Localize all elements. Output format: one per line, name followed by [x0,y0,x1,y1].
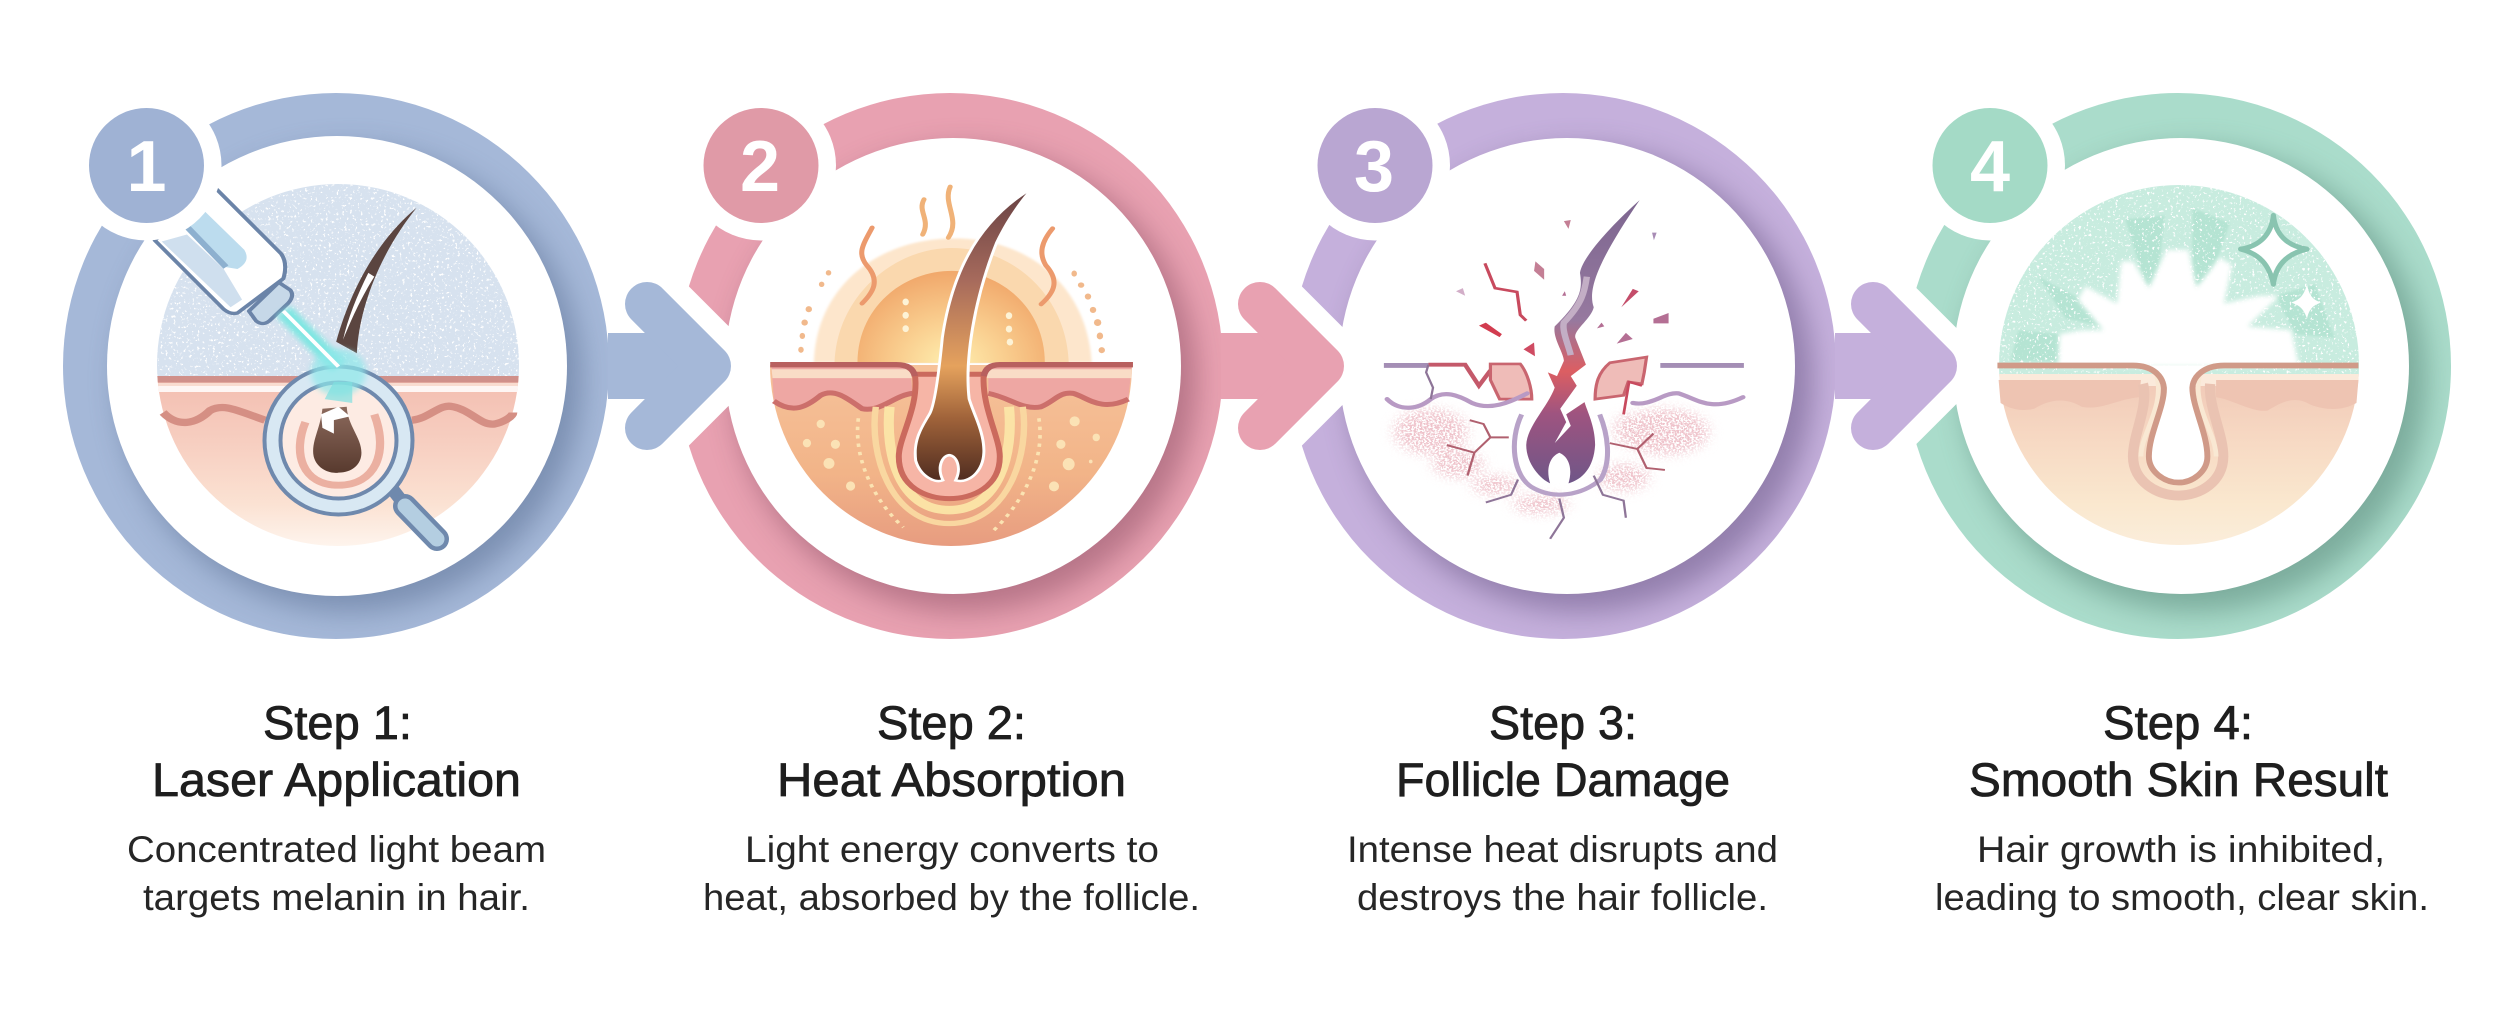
skin wave [774,393,1128,409]
step 4: number badge [1915,90,2065,240]
empty follicle and surface line [2133,365,2224,483]
hair shaft and bulb [917,193,1026,480]
arrow 1 to 2 [608,304,709,428]
magnifier [264,366,437,539]
description: destroys the hair follicle. [1357,877,1768,918]
heading: Step 3: [1489,696,1637,749]
step 4: ring [1905,93,2451,639]
pink grain under skin [1394,409,1709,514]
sparkle small [2291,284,2321,319]
step 3: illustration follicle damage [1384,200,1744,539]
follicle sheath [2133,384,2223,496]
step 1: ring [63,93,609,639]
sparkle large [2241,215,2307,284]
arrow 3 to 4 [1835,304,1935,428]
step 2 caption [703,696,1200,918]
description: Intense heat disrupts and [1347,829,1778,870]
laser beam [283,311,338,367]
description: Hair growth is inhibited, [1977,829,2385,870]
step 1: illustration laser on follicle [155,180,521,548]
step 1: number badge: 1 [126,127,167,207]
step 3 caption [1347,696,1778,918]
broken skin surface [1384,359,1744,372]
step 4 caption [1935,696,2429,918]
heading: Step 1: [263,696,412,749]
description: targets melanin in hair. [143,877,530,918]
heat rings around follicle [875,407,1024,523]
heading: Step 4: [2103,696,2253,749]
cracks [1485,263,1526,321]
sky and skin cross-section [155,180,521,548]
heat dots [798,270,1105,353]
handpiece [155,189,285,313]
skin bowl [770,365,1132,546]
step 2: illustration heat absorption [770,187,1133,546]
skin wave [163,406,513,424]
step 4: number badge: 4 [1970,127,2010,207]
sunburst [2058,250,2299,367]
description: Concentrated light beam [127,829,546,870]
sky and skin disc [1998,184,2360,550]
heading: Smooth Skin Result [1969,753,2388,806]
skin wave band [1999,380,2358,411]
step 4: illustration smooth skin [1997,184,2360,550]
follicle [300,414,380,485]
description: leading to smooth, clear skin. [1935,877,2429,918]
steam wisps [862,228,1054,304]
step 2: number badge: 2 [740,127,780,207]
arrow 2 to 3 [1221,304,1322,428]
step 3: ring [1290,93,1836,639]
upper skin layer [772,367,913,409]
follicle outline [1514,414,1608,495]
debris fragments [1456,220,1669,356]
heading: Step 2: [877,696,1026,749]
step 2: number badge [686,90,836,240]
step 1: number badge [72,90,222,240]
follicle notch [899,374,1000,499]
step 3: number badge: 3 [1354,127,1394,207]
description: Light energy converts to [745,829,1159,870]
description: heat, absorbed by the follicle. [703,877,1200,918]
step 1 caption [127,696,546,918]
heading: Follicle Damage [1396,753,1730,806]
hair shaft [336,208,417,353]
cracked hair and bulb [1526,200,1640,483]
damaged skin flaps [1490,364,1532,399]
step 3: number badge [1300,90,1450,240]
heading: Laser Application [152,753,521,806]
skin waves [1387,393,1743,408]
step 2: ring [677,93,1223,639]
heading: Heat Absorption [777,753,1126,806]
heat glow [814,238,1092,363]
